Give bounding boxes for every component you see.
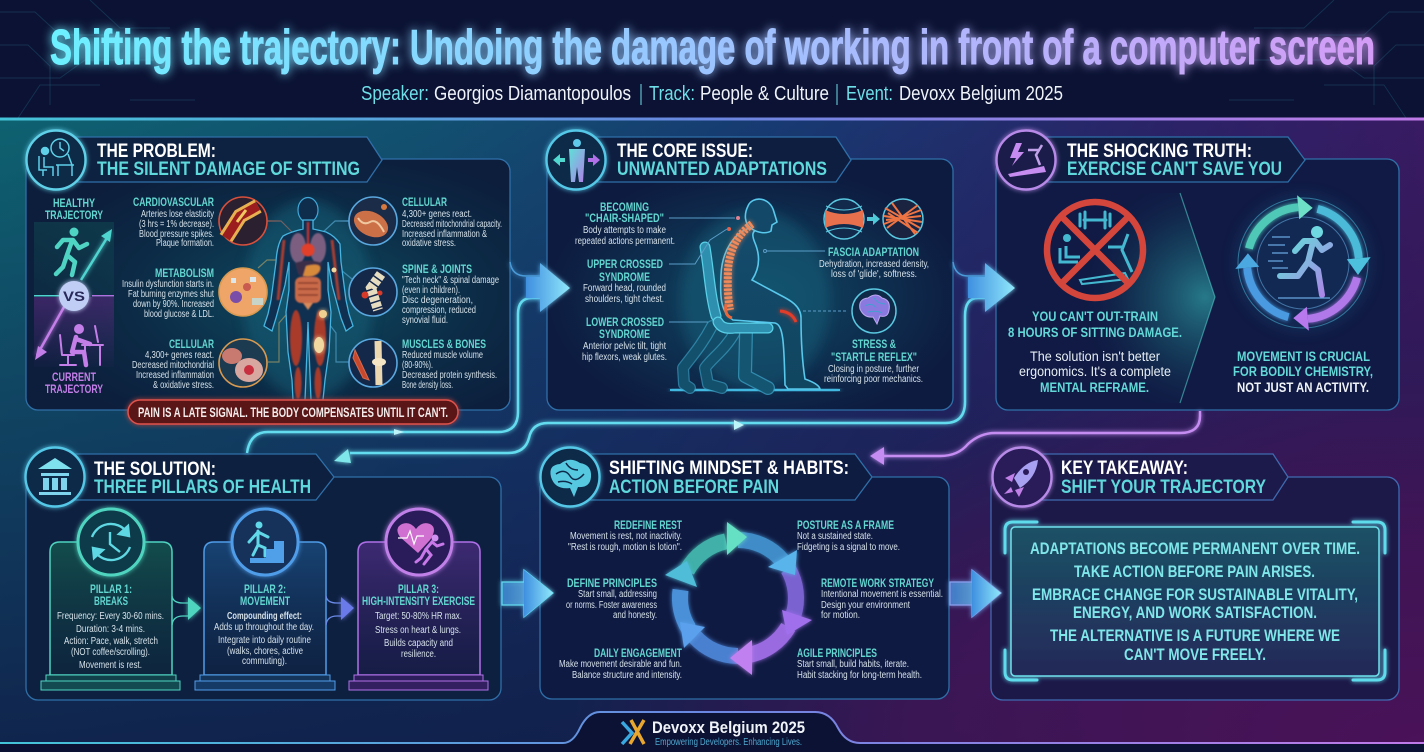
flow connector: problem to solution	[247, 298, 542, 453]
arrow: fascia change	[867, 213, 880, 225]
subtitle: speaker, track, event: Event:	[846, 83, 893, 105]
header: core issue: UNWANTED ADAPTATIONS	[617, 159, 827, 180]
pillar 3: high-intensity exercise: Builds capacity and	[384, 638, 453, 649]
body connector lines	[258, 221, 352, 362]
text: muscles and bones: Bone density loss.	[402, 380, 453, 391]
vs badge	[59, 281, 89, 311]
icon: sitting person	[60, 324, 103, 365]
text: upper crossed syndrome: shoulders, tight chest.	[585, 294, 664, 305]
pillar 2: movement: (walks, chores, active	[227, 646, 303, 657]
key messages box: EMBRACE CHANGE FOR SUSTAINABLE VITALITY,	[1032, 586, 1358, 604]
text: cellular left: Decreased mitochondrial	[132, 360, 214, 371]
text: cellular right	[402, 195, 502, 249]
text: daily engagement: DAILY ENGAGEMENT	[594, 646, 682, 660]
text: daily engagement	[559, 646, 682, 681]
header: key takeaway	[1035, 454, 1288, 500]
text: mental reframe: ergonomics. It's a complete	[1019, 364, 1171, 379]
text: muscles and bones: MUSCLES & BONES	[402, 337, 486, 351]
icon: mitochondrion	[349, 197, 397, 245]
callout: pain is a late signal	[128, 400, 458, 424]
arrow: pillar 1 to 2	[172, 596, 201, 625]
pillar 1: breaks: PILLAR 1:	[90, 582, 132, 596]
healthy trajectory label	[45, 196, 103, 222]
text: movement is crucial: NOT JUST AN ACTIVITY.	[1237, 380, 1369, 395]
text: fascia adaptation: Dehydration, increased density,	[819, 259, 929, 270]
pillar 3: high-intensity exercise: Target: 50-80% HR max.	[375, 611, 462, 622]
header: shocking truth	[1030, 137, 1305, 182]
header: the problem	[60, 137, 382, 182]
icon: rocket	[992, 448, 1052, 506]
text: cellular left: CELLULAR	[169, 337, 214, 351]
key messages box: ADAPTATIONS BECOME PERMANENT OVER TIME.	[1030, 540, 1360, 558]
pillar 3: high-intensity exercise: PILLAR 3:	[398, 582, 439, 596]
text: stress and startle reflex: STRESS &	[852, 337, 896, 351]
vs badge: VS	[63, 288, 85, 304]
text: becoming chair-shaped: BECOMING	[600, 200, 649, 214]
text: movement is crucial: MOVEMENT IS CRUCIAL	[1237, 349, 1370, 364]
icon: fascia after	[883, 199, 923, 239]
text: redefine rest	[568, 518, 682, 553]
arrow: problem to core issue	[510, 262, 570, 312]
subtitle: speaker, track, event: Speaker:	[361, 83, 429, 105]
key messages box: CAN'T MOVE FREELY.	[1124, 646, 1266, 664]
text: stress and startle reflex: "STARTLE REFLEX"	[831, 350, 917, 364]
icon: damaged cells	[219, 339, 267, 387]
footer: Devoxx Belgium 2025	[652, 718, 805, 737]
icon: lightning and treadmill	[996, 130, 1056, 190]
chevron background	[997, 193, 1215, 403]
arrow: core issue to shocking truth	[953, 262, 1015, 312]
text: cardiovascular	[133, 195, 214, 249]
text: stress and startle reflex: Closing in posture, further	[828, 364, 920, 375]
text: metabolism: Fat burning enzymes shut	[128, 289, 214, 300]
text: cellular left	[132, 337, 214, 391]
pillar 1: breaks: BREAKS	[94, 594, 128, 608]
subtitle: speaker, track, event: Track:	[649, 83, 695, 105]
text: muscles and bones: (80-90%).	[402, 360, 433, 371]
text: lower crossed syndrome: Anterior pelvic tilt, tight	[583, 341, 666, 352]
text: cellular right: 4,300+ genes react.	[402, 209, 472, 220]
text: remote work strategy	[821, 576, 943, 621]
pillar 2: movement: Compounding effect:	[227, 611, 302, 622]
text: lower crossed syndrome: LOWER CROSSED	[586, 315, 664, 329]
text: mental reframe: MENTAL REFRAME.	[1040, 380, 1149, 395]
text: posture as a frame: Not a sustained state.	[797, 531, 873, 542]
header: the solution: THE SOLUTION:	[94, 459, 216, 480]
text: cellular right: Increased inflammation &	[402, 229, 487, 240]
panel: the core issue	[546, 130, 953, 410]
cycle of arrows	[665, 522, 812, 675]
text: becoming chair-shaped: Body attempts to make	[583, 225, 666, 236]
text: muscles and bones: Decreased protein synthesis.	[402, 370, 497, 381]
header: the problem: THE SILENT DAMAGE OF SITTING	[97, 159, 360, 180]
text: cellular right: CELLULAR	[402, 195, 447, 209]
text: cardiovascular: Plaque formation.	[156, 238, 214, 249]
text: lower crossed syndrome: SYNDROME	[599, 327, 650, 341]
key messages box: TAKE ACTION BEFORE PAIN ARISES.	[1074, 563, 1315, 581]
trajectory backgrounds	[34, 222, 114, 296]
pillar 2: movement: Integrate into daily routine	[218, 635, 311, 646]
flow connector: core issue to solution	[334, 298, 986, 463]
footer: Empowering Developers. Enhancing Lives.	[655, 737, 802, 748]
pillar 1: breaks: (NOT coffee/scrolling).	[71, 647, 150, 658]
panel: the solution	[26, 448, 501, 700]
icon: heart and runner	[397, 523, 443, 564]
header: the solution	[60, 454, 334, 500]
icon: temple	[26, 448, 84, 506]
text: define principles: DEFINE PRINCIPLES	[567, 576, 657, 590]
text: muscles and bones	[402, 337, 497, 391]
text: becoming chair-shaped: "CHAIR-SHAPED"	[585, 211, 664, 225]
text: metabolism: blood glucose & LDL.	[144, 309, 214, 320]
icon: metabolism cell	[219, 268, 267, 316]
text: lower crossed syndrome	[582, 315, 667, 363]
text: agile principles: Start small, build habits, iterate.	[797, 659, 909, 670]
header: shocking truth: EXERCISE CAN'T SAVE YOU	[1067, 159, 1282, 180]
text: becoming chair-shaped: repeated actions permanent.	[575, 236, 675, 247]
text: mental reframe	[1019, 349, 1171, 395]
current trajectory label: TRAJECTORY	[45, 382, 103, 396]
text: agile principles: Habit stacking for long-term health.	[797, 670, 922, 681]
text: spine and joints: "Tech neck" & spinal damage	[402, 275, 499, 286]
icon: runner	[56, 228, 87, 275]
header: core issue: THE CORE ISSUE:	[617, 141, 753, 162]
text: remote work strategy: Intentional movement is essential.	[821, 589, 943, 600]
text: mental reframe: The solution isn't better	[1030, 349, 1160, 364]
text: cellular right: Decreased mitochondrial capacity.	[402, 219, 502, 230]
text: spine and joints: Disc degeneration,	[402, 295, 473, 306]
text: upper crossed syndrome: SYNDROME	[599, 270, 650, 284]
text: redefine rest: Movement is rest, not inactivity.	[570, 531, 682, 542]
pillar 1: breaks: Duration: 3-4 mins.	[76, 624, 145, 635]
text: becoming chair-shaped	[575, 200, 675, 247]
text: metabolism: METABOLISM	[155, 266, 214, 280]
key messages box: THE ALTERNATIVE IS A FUTURE WHERE WE	[1050, 627, 1340, 645]
pillar 2: movement: PILLAR 2:	[244, 582, 286, 596]
pillar 3: high-intensity exercise: Stress on heart & lungs.	[375, 625, 461, 636]
text: cellular right: oxidative stress.	[402, 238, 456, 249]
pillar 2: movement: MOVEMENT	[240, 594, 290, 608]
arrow: mindset to takeaway	[950, 570, 1001, 617]
text: define principles	[566, 576, 657, 621]
arrow: current down	[37, 307, 64, 355]
text: cellular left: Increased inflammation	[136, 370, 214, 381]
seated figure on chair	[670, 199, 840, 391]
subtitle: speaker, track, event: Devoxx Belgium 2025	[899, 83, 1063, 105]
text: daily engagement: Balance structure and intensity.	[572, 670, 682, 681]
pillar 1: breaks: Movement is rest.	[79, 660, 142, 671]
text: spine and joints: SPINE & JOINTS	[402, 262, 472, 276]
pillar 3: high-intensity exercise	[349, 509, 488, 690]
text: cardiovascular: Blood pressure spikes.	[139, 229, 214, 240]
text: movement is crucial: FOR BODILY CHEMISTRY,	[1233, 364, 1373, 379]
pillar 1: breaks: Action: Pace, walk, stretch	[64, 636, 158, 647]
text: fascia adaptation	[819, 245, 929, 280]
text: posture as a frame: POSTURE AS A FRAME	[797, 518, 894, 532]
icon: running cycle	[1233, 193, 1373, 333]
callout: pain is a late signal: PAIN IS A LATE SIGNAL. THE BODY COMPENSATES UNTIL IT CAN'T.	[138, 404, 448, 420]
current trajectory label	[45, 370, 103, 396]
pillar 1: breaks	[41, 509, 180, 690]
icon: spine	[349, 268, 397, 316]
header: core issue	[580, 137, 851, 182]
text: metabolism: Insulin dysfunction starts in.	[122, 279, 214, 290]
text: upper crossed syndrome: Forward head, rounded	[583, 283, 666, 294]
text: spine and joints	[402, 262, 499, 326]
text: redefine rest: "Rest is rough, motion is lotion".	[568, 542, 682, 553]
header: mindset	[585, 454, 872, 500]
text: can't out-train	[1008, 309, 1182, 340]
pillar 2: movement: Adds up throughout the day.	[214, 622, 314, 633]
text: stress and startle reflex: reinforcing poor mechanics.	[824, 374, 923, 385]
header: key takeaway: SHIFT YOUR TRAJECTORY	[1061, 477, 1266, 498]
arrow: pillar 2 to 3	[326, 596, 354, 625]
anatomy figure	[243, 198, 373, 400]
arrow: solution to mindset	[502, 570, 553, 617]
healthy trajectory label: TRAJECTORY	[45, 208, 103, 222]
text: cardiovascular: (3 hrs = 1% decrease).	[139, 219, 214, 230]
icon: brain	[852, 289, 896, 333]
pillar 2: movement	[195, 509, 335, 690]
pillar 3: high-intensity exercise: HIGH-INTENSITY EXERCISE	[362, 594, 475, 608]
text: remote work strategy: REMOTE WORK STRATEGY	[821, 576, 934, 590]
text: muscles and bones: Reduced muscle volume	[402, 350, 483, 361]
header: mindset: SHIFTING MINDSET & HABITS:	[609, 458, 849, 479]
header: the problem: THE PROBLEM:	[97, 141, 216, 162]
icon: no exercise sign	[1047, 202, 1143, 298]
subtitle: speaker, track, event	[361, 83, 1063, 105]
text: spine and joints: compression, reduced	[402, 305, 476, 316]
text: agile principles	[797, 646, 922, 681]
text: can't out-train: 8 HOURS OF SITTING DAMAGE.	[1008, 325, 1182, 340]
header: the solution: THREE PILLARS OF HEALTH	[94, 477, 311, 498]
text: define principles: and honesty.	[613, 610, 657, 621]
header: key takeaway: KEY TAKEAWAY:	[1061, 458, 1188, 479]
header: mindset: ACTION BEFORE PAIN	[609, 477, 779, 498]
text: upper crossed syndrome	[583, 257, 666, 305]
text: fascia adaptation: FASCIA ADAPTATION	[828, 245, 919, 259]
text: redefine rest: REDEFINE REST	[614, 518, 682, 532]
text: define principles: or norms. Foster awareness	[566, 600, 657, 611]
healthy trajectory label: HEALTHY	[53, 196, 95, 210]
text: fascia adaptation: loss of 'glide', softness.	[831, 269, 917, 280]
footer	[0, 712, 1424, 752]
text: movement is crucial	[1233, 349, 1373, 395]
icon: body with arrows	[546, 130, 606, 190]
text: remote work strategy: for motion.	[821, 610, 860, 621]
panel: the problem	[26, 130, 510, 424]
icon: muscle and bone	[349, 339, 397, 387]
key messages box: ENERGY, AND WORK SATISFACTION.	[1073, 604, 1317, 622]
text: spine and joints: (even in children).	[402, 285, 460, 296]
subtitle: speaker, track, event: Georgios Diamantopoulos	[434, 83, 631, 105]
icon: person at desk with clock	[26, 130, 86, 190]
pillar 2: movement: commuting).	[242, 656, 287, 667]
panel: shifting mindset and habits	[540, 448, 949, 699]
text: define principles: Start small, addressing	[578, 589, 657, 600]
callout lines	[669, 216, 848, 322]
header: shocking truth: THE SHOCKING TRUTH:	[1067, 141, 1252, 162]
key messages box	[1005, 522, 1385, 680]
current trajectory label: CURRENT	[52, 370, 96, 384]
text: remote work strategy: Design your environment	[821, 600, 910, 611]
text: stress and startle reflex	[824, 337, 923, 385]
flow connector: shocking truth to mindset	[870, 411, 1200, 465]
icon: person climbing stairs	[249, 522, 284, 563]
pillar 1: breaks: Frequency: Every 30-60 mins.	[57, 611, 164, 622]
panel: key takeaway	[991, 448, 1399, 700]
text: lower crossed syndrome: hip flexors, weak glutes.	[582, 352, 667, 363]
text: posture as a frame	[797, 518, 900, 553]
text: posture as a frame: Fidgeting is a signal to move.	[797, 542, 900, 553]
subtitle: speaker, track, event: People & Culture	[700, 83, 829, 105]
icon: fascia before	[824, 199, 864, 239]
text: spine and joints: synovial fluid.	[402, 315, 448, 326]
arrow: healthy up	[81, 233, 110, 280]
text: upper crossed syndrome: UPPER CROSSED	[587, 257, 663, 271]
text: can't out-train: YOU CAN'T OUT-TRAIN	[1032, 309, 1158, 324]
text: metabolism	[122, 266, 214, 320]
icon: clock with arrows	[92, 524, 130, 560]
icon: artery	[219, 197, 267, 245]
text: cellular left: & oxidative stress.	[153, 380, 214, 391]
icon: brain mind	[540, 448, 600, 506]
text: agile principles: AGILE PRINCIPLES	[797, 646, 877, 660]
panel: the shocking truth	[996, 130, 1399, 410]
text: metabolism: down by 90%. Increased	[133, 299, 214, 310]
text: cellular left: 4,300+ genes react.	[145, 350, 214, 361]
text: daily engagement: Make movement desirable and fun.	[559, 659, 682, 670]
text: cardiovascular: Arteries lose elasticity	[141, 209, 214, 220]
text: cardiovascular: CARDIOVASCULAR	[133, 195, 214, 209]
logo: devoxx	[622, 720, 644, 744]
pillar 3: high-intensity exercise: resilience.	[401, 649, 436, 660]
